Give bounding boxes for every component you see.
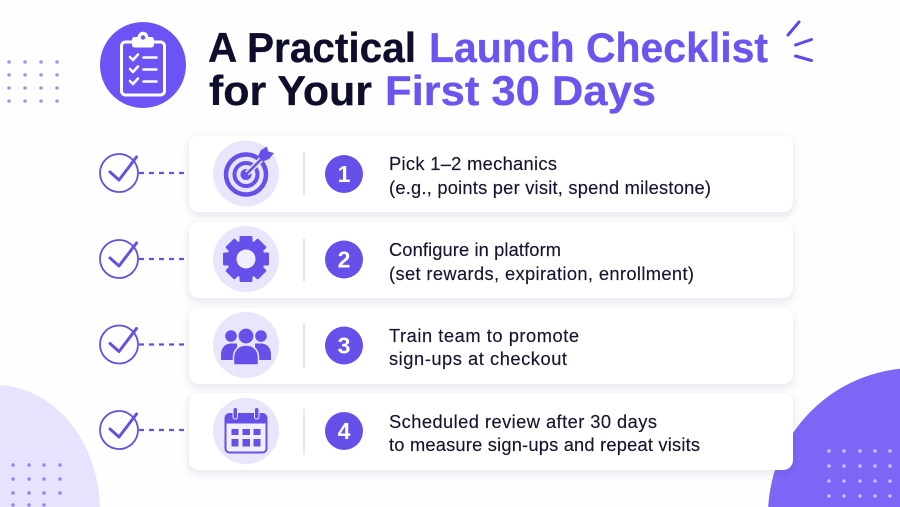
step 4 text: Scheduled review after 30 days: [389, 411, 657, 432]
title: A Practical: [208, 24, 416, 71]
icon: clipboard checklist badge: [100, 22, 186, 108]
step 4 row: [100, 393, 793, 470]
divider 3: [303, 323, 305, 368]
icon: calendar: [213, 398, 279, 464]
number badge 1: 1: [338, 161, 351, 187]
step 4 text: to measure sign-ups and repeat visits: [389, 434, 700, 455]
divider 4: [303, 409, 305, 454]
check mark 2: [100, 240, 138, 278]
step 2 text: [389, 239, 694, 284]
step 1 row: [100, 135, 793, 212]
connector 4: [139, 429, 188, 431]
card 4: [189, 393, 793, 470]
number badge 4: [325, 412, 363, 450]
decoration: lower-right circle with dots: [768, 369, 900, 507]
card 3: [189, 308, 793, 384]
step 2 text: (set rewards, expiration, enrollment): [389, 263, 694, 284]
step 2 text: Configure in platform: [389, 239, 561, 260]
icon: gear: [213, 226, 279, 292]
title: First 30 Days: [385, 67, 656, 114]
check mark 3: [100, 326, 138, 364]
number badge 2: 2: [338, 246, 350, 272]
connector 1: [139, 172, 188, 174]
card 1: [189, 135, 793, 212]
icon: team of people: [213, 312, 279, 378]
step 3 text: Train team to promote: [389, 325, 579, 346]
title: for Your: [209, 67, 372, 114]
check mark 4: [100, 411, 138, 449]
step 4 text: [389, 411, 700, 455]
title: [208, 24, 768, 114]
title: Launch Checklist: [429, 24, 768, 71]
step 1 text: Pick 1–2 mechanics: [389, 153, 557, 174]
decoration: lower-left circle with dots: [0, 385, 100, 507]
connector 3: [139, 343, 188, 346]
number badge 2: [325, 240, 363, 278]
step 3 text: sign-ups at checkout: [389, 348, 567, 369]
check mark 1: [100, 154, 138, 192]
connector 2: [139, 258, 188, 260]
step 1 text: [389, 153, 711, 198]
icon: target with arrow: [213, 140, 279, 206]
decoration: top-left dot grid: [7, 60, 59, 103]
number badge 4: 4: [338, 418, 351, 444]
divider 2: [303, 238, 305, 282]
number badge 3: 3: [338, 332, 350, 358]
step 3 row: [100, 308, 793, 384]
step 3 text: [389, 325, 579, 369]
card 2: [189, 222, 793, 298]
divider 1: [303, 152, 305, 196]
decoration: sparkle strokes: [788, 22, 812, 60]
step 1 text: (e.g., points per visit, spend milestone): [389, 177, 711, 198]
number badge 3: [325, 326, 363, 364]
number badge 1: [325, 155, 363, 193]
step 2 row: [100, 222, 793, 298]
